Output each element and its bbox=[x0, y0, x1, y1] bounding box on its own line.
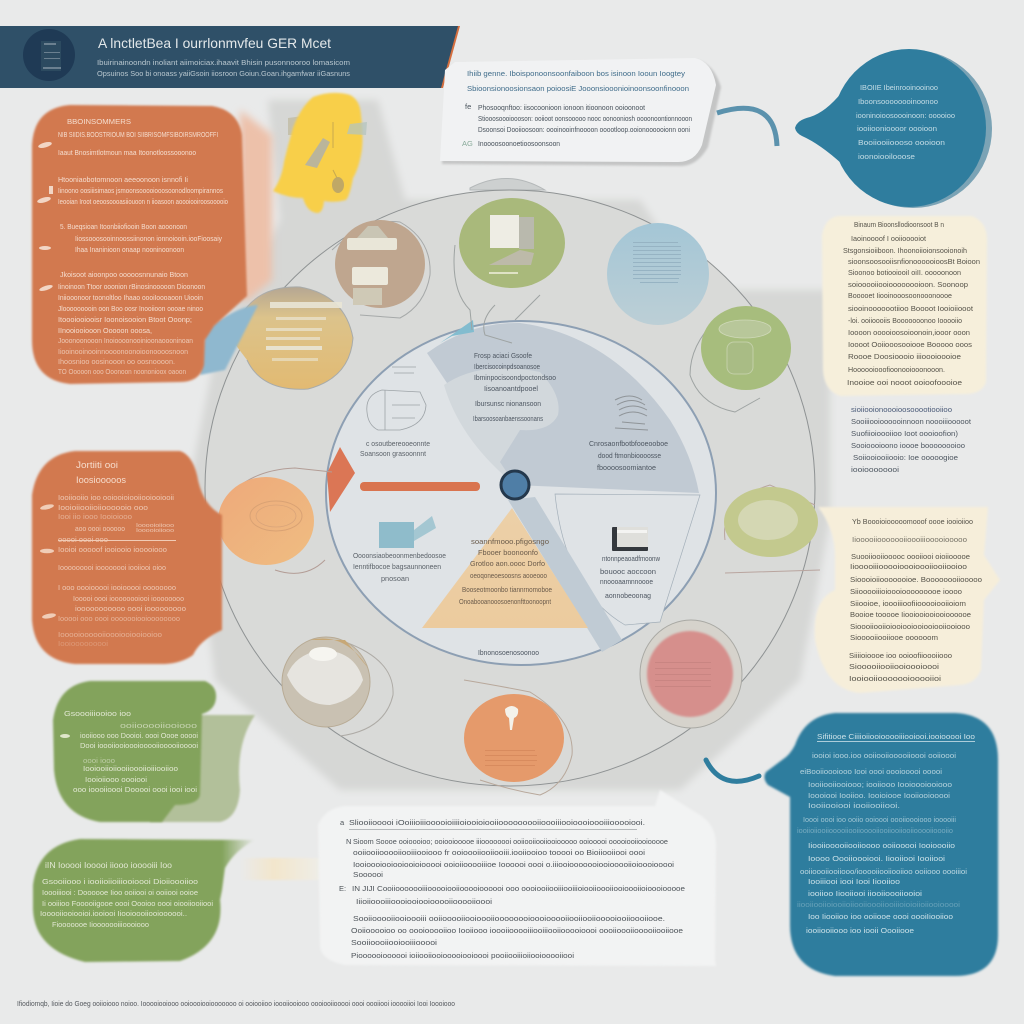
card text: Stsgonsioiiboon. Ihoonoiioionsooionoih bbox=[843, 246, 967, 255]
sector text: right: dood ftmonbioooosse bbox=[598, 451, 661, 460]
panel: orange causes bbox=[32, 105, 272, 384]
text block: Iooiooiioiiooiioooiioiiiooiioo bbox=[83, 764, 178, 773]
card text: Ioooiooi Iooiioo. Iooioiooe Iooiiooiooooi bbox=[808, 791, 950, 800]
card text: Ioooo Oooiioooiooi. Iiooiiooi Iooiiooi bbox=[808, 854, 945, 863]
text block bbox=[64, 709, 198, 794]
text block: Iooooioiiooo bbox=[136, 523, 174, 529]
sector text: left: c osoutbereooeonnte bbox=[366, 439, 430, 448]
text block: Dooi ioooiiooioooiooooiiooooiiooooi bbox=[80, 741, 198, 750]
panel: central wheel bbox=[205, 178, 815, 786]
note text: Ooiiooooioo oo oooiooooiioo Iooiiooo ioooiiooooiiiooiiiooiiooooioooi oooiioooiiooooiiooiiooe bbox=[351, 926, 683, 935]
text block: Fiooooooe Iiooooooiiioooiooo bbox=[52, 920, 149, 929]
bubble text: iooninoioosoooinoon: ooooioo bbox=[856, 111, 955, 120]
text block: right middle: iooioooooooi bbox=[851, 465, 899, 474]
text block: TO Ooooon ooo Ooonoon noononioox oaoon bbox=[58, 367, 186, 376]
card text: Booioe tooooe Iiooiooiooiooioooooe bbox=[850, 610, 971, 619]
icon: bullet bbox=[60, 734, 70, 738]
panel: green card upper bbox=[53, 681, 255, 822]
text block: Gsoooiiiooioo ioo bbox=[64, 709, 131, 718]
text block: right middle: Sooiiiooioooooinnoon noooiiiooooot bbox=[851, 417, 972, 426]
note text: Inoooosoonoetioosoonsoon bbox=[478, 139, 560, 148]
sector text: top: Ibarsoosoanbaenssoonans bbox=[473, 414, 543, 423]
panel: right lower cream card bbox=[815, 507, 1000, 693]
note text: E: bbox=[339, 884, 346, 893]
icon: blue note bbox=[379, 516, 436, 548]
outer ring bbox=[205, 178, 815, 786]
sector text: top: Iisoanoantdpooel bbox=[484, 384, 538, 393]
card text: Ioooi oooi ioo ooiio ooioooi oooiioooiooo iooooiii bbox=[803, 815, 956, 824]
icon: bulb bbox=[505, 706, 518, 730]
text block: right middle: sioiiooionoooioosooootiooiioo bbox=[851, 405, 952, 414]
text block: right middle: Suofiioioooiioo Ioot oooioofion) bbox=[851, 429, 959, 438]
card text: Siiooioe, ioooiiioofiiooooiooiioiom bbox=[850, 599, 966, 608]
text block: ooiiooooiiooiooo bbox=[120, 721, 197, 730]
card text: Sioooiiooiioiooiooiooiooiooiiooiooo bbox=[850, 622, 970, 631]
note text: fe bbox=[465, 102, 471, 111]
text block: Iooooi oooi ioooooooiooi ioooooooo bbox=[73, 594, 184, 603]
text block: iooooooooooo oooi iooooooooo bbox=[75, 604, 186, 613]
sector text: triangle: soannfmooo.pfigosngo bbox=[471, 537, 549, 546]
card text: Roooe Doosioooio iiioooioooioe bbox=[848, 352, 961, 361]
node: pink circle bbox=[640, 620, 742, 728]
sector text: right bbox=[589, 439, 668, 472]
node: bottom orange circle bbox=[464, 680, 572, 795]
note text bbox=[462, 69, 692, 148]
text block: Iooooiiooiooioi.iooiooi Iiooioooiiooioooooi.. bbox=[40, 909, 187, 918]
card text: Iiooooiiooooooiioooiiiooooiooooo bbox=[852, 535, 967, 544]
sector text: top: Ibminpocisoondpoctondsoo bbox=[474, 373, 556, 382]
icon: yellow lightbulb blob bbox=[273, 93, 367, 213]
sector text: triangle bbox=[459, 537, 552, 606]
card text: Iiooiiooooiiooiioooo ooiiooooi Iooioooiio bbox=[808, 841, 955, 850]
note text: Soooooi bbox=[353, 870, 383, 879]
panel: bottom white note bbox=[318, 790, 716, 966]
card text: Siiiioioooe ioo ooioofiioooiiooo bbox=[849, 651, 952, 660]
card text: Yb Boooioiooooomooof oooe iooioiioo bbox=[852, 517, 973, 526]
note text: Phosooqnftoo: iisocoonioon ionoon itioonoon ooioonoot bbox=[478, 103, 646, 112]
text block: Iiooinooinooinnoooonoonoioonoooosnoon bbox=[58, 347, 188, 356]
text block: Ioooiiiooi : Doooooe Iioo ooiiooi oi ooiiooi ooioe bbox=[42, 888, 198, 897]
text block: Iooioi ooooof iooiooio iooooiooo bbox=[58, 545, 167, 554]
sector text: top: Frosp aciaci Gsoofe bbox=[474, 351, 532, 360]
sector text: lower left: Oooonsiaobeoonmenbedoosoe bbox=[353, 551, 446, 560]
node: yellow circle bbox=[232, 287, 353, 389]
panel: top white note bbox=[440, 58, 721, 166]
node: blue circle bbox=[607, 223, 709, 325]
bubble text: Booiiooiioooso oooioon bbox=[858, 138, 945, 147]
card text: Binaum Bioonsllodioonsoot B n bbox=[854, 220, 944, 229]
text block: Ii ooiiioo Fooooiigooe oooi Oooioo oooi oiooiiooiiooi bbox=[42, 899, 213, 908]
subtitle bbox=[97, 58, 350, 78]
card text: Hoooooiooofioonooiooonooon. bbox=[848, 365, 945, 374]
text block: Ioosiooooos bbox=[76, 475, 127, 485]
icon: header badge bbox=[23, 29, 75, 81]
card text: Siooooiiooiiooioooioooi bbox=[849, 662, 939, 671]
bubble text: IBOIIE Ibeinrooinooinoo bbox=[860, 83, 938, 92]
text block: right middle bbox=[851, 405, 972, 474]
text block: I ooo oooiooooi iooiooooi oooooooo bbox=[58, 583, 176, 592]
node: tan circle bbox=[332, 220, 430, 318]
card text: eiBooiioooiooo Iooi oooi oooiooooi ooooi bbox=[800, 767, 942, 776]
text block: Jooonoonooon Inoioooonooinioonaoooninoan bbox=[58, 336, 193, 345]
card text: iooiiooiiooo ioo iooii Oooiiooe bbox=[806, 926, 914, 935]
accent: blue pointer bbox=[440, 320, 474, 343]
note text: Sooiiooooiiooioooiii ooiiooooiiooioooiioooooooioooiooooiiooiiooiiooooiooiioooiiooe. bbox=[353, 914, 665, 923]
sector text: triangle: oeoqoneoesoosns aooeooo bbox=[470, 571, 547, 580]
node: light green circle bbox=[690, 306, 791, 412]
note text: ooiiooiiooooiiooiiiooiooo fr ooioooiiooiiooiii.iooiiooioo tooooi oo Bioiiooiiooi oooi bbox=[353, 848, 645, 857]
panel: green card lower bbox=[33, 839, 325, 962]
sector text: triangle: Grotloo aon.oooc Dorfo bbox=[470, 559, 545, 568]
card text bbox=[843, 220, 980, 387]
sector text: top: Ibursunsc nionansoon bbox=[475, 399, 541, 408]
card text: -loi. ooiioooiis Booooooonoo Iooooiio bbox=[848, 316, 962, 325]
sector text: top bbox=[473, 351, 556, 423]
note text: Pioooooioooooi ioiiooiiooiooooiooioooi pooiiooiiioiiooiooooiiooi bbox=[351, 951, 574, 960]
text block: Jkoisoot aioonpoo ooooosnnunaio Btoon bbox=[60, 270, 188, 279]
hand: red bar bbox=[360, 482, 480, 491]
text block bbox=[58, 117, 228, 376]
card text: Siooooiiooiiooe oooooom bbox=[850, 633, 938, 642]
sector text: right: fboooosoomiantoe bbox=[597, 463, 656, 472]
text block: Ieooian Iroot oeoosoooasiiouoon n iioasoon aoooiooiroosooooio bbox=[58, 197, 228, 206]
card text: Ioooot Ooiiooosooiooe Booooo ooos bbox=[848, 340, 972, 349]
note text: a bbox=[340, 818, 345, 827]
text block bbox=[58, 460, 186, 648]
card text bbox=[797, 732, 975, 935]
sector text: lower left bbox=[353, 551, 446, 583]
sector text: bottom: Ibnonosoenosoonoo bbox=[478, 648, 539, 657]
sector text: left bbox=[360, 439, 430, 458]
text block: Ihoosnioo oosinooon oo oosnoooon. bbox=[58, 357, 175, 366]
text block: Iinoono oosiiisimaos jsmoonsooooiooosoonodloompirannos bbox=[58, 186, 223, 195]
bubble text bbox=[856, 83, 955, 161]
panel: right cream card bbox=[822, 216, 987, 396]
text block: BBOINSOMMERS bbox=[67, 117, 131, 126]
note text: Sooiioooiiooiooiiiooooi bbox=[351, 938, 437, 947]
text block: ooooi oooi ooo bbox=[58, 535, 108, 544]
sector text: top: Ibercisocoinpdsoanosoe bbox=[474, 362, 540, 371]
card text: iooiioiiooiiooooiiooiiooooiiooiiooiiooiiooooiioooiio bbox=[797, 826, 953, 835]
node: orange circle bbox=[218, 468, 332, 573]
text block: Iooioiiooo oooiooi bbox=[85, 775, 147, 784]
sector text: book: nnoooaamnnoooe bbox=[600, 577, 653, 586]
card text: Booooet Iiooinooosoonooonoooe bbox=[848, 291, 952, 300]
note text: Iiioiioooiiioooiooiooiooooiiooooiioooi bbox=[356, 897, 492, 906]
text block: Itoooiooiooisr Ioonoisooion Btoot Ooonp; bbox=[58, 315, 192, 324]
card text bbox=[849, 517, 982, 683]
text block: 5. Bueqsioan Itoonbiiofiooin Boon aooonoon bbox=[60, 222, 187, 231]
text block: Iooooooooi ioooooooi iooiiooi oioo bbox=[58, 563, 166, 572]
sector text: triangle: Fbooer boonoonfo bbox=[478, 548, 538, 557]
card text: ooiioooiiooiiooo/iooooiiooiiooiioo ooiiooo oooiiioi bbox=[800, 867, 967, 876]
card text: Iiooooiiiooooioooioooiiooiiooioo bbox=[850, 562, 967, 571]
note text: Ihiib genne. Iboisponoonsoonfaiboon bos isinoon Iooun Ioogtey bbox=[467, 69, 685, 78]
arrow: top curved connector bbox=[717, 108, 777, 146]
bubble text: Iboonsoooooooinoonoo bbox=[858, 97, 938, 106]
note text: Stiooosoooioooson: ooiioot oonsooooo nooc oonooniosh oooonoontionnooon bbox=[478, 114, 692, 123]
card text: Sioooioiiooooooioe. Boooooooiiooooo bbox=[850, 575, 982, 584]
note text: Sliooiiooooi iOoiiioiiiooooioiiiioiooioiooiiooooooooiioooiiiooioooioooiiiooooiooi. bbox=[349, 818, 645, 827]
sector text: triangle: Onoabooanooosoenonfttoonoopnt bbox=[459, 597, 552, 606]
text block: right middle: Soiiooiooiiooio: Ioe ooooogioe bbox=[853, 453, 958, 462]
arrow: blue curved connector bbox=[706, 760, 759, 781]
text block: Jlooooooooin oon Boo oosr Inooiioon oooae ninoo bbox=[58, 304, 203, 313]
title: A lnctletBea I ourrlonmvfeu GER Mcet bbox=[98, 35, 331, 51]
card text: soiooooiiooioooooooioon. Soonoop bbox=[848, 280, 968, 289]
header banner bbox=[0, 26, 460, 88]
text block: NIB SIIDIS.BOOSTRIOUM BOI SIIBRISOMFSIBOIRSMROOFFI bbox=[58, 130, 218, 139]
sector text: lower left: Ienntifbocoe bagsaunnoneen bbox=[353, 562, 441, 571]
icons: bullets bbox=[40, 503, 56, 619]
card text: sioonsoosooiisnfionoooooioosBt Boioon bbox=[848, 257, 980, 266]
panel: left orange card bbox=[32, 451, 222, 664]
icon: sketch building bbox=[367, 367, 426, 430]
text block: aoo oooi oooooo bbox=[75, 524, 125, 533]
text block: Iniiooonoor toonoltloo Ihaao oooiIoooaoon Uiooin bbox=[58, 293, 203, 302]
sector text: book: aonnobeoonag bbox=[605, 591, 651, 600]
icon: book bbox=[612, 527, 648, 551]
sector text: left: Soansoon grasoonnnt bbox=[360, 449, 427, 458]
panel: blue speech bubble bbox=[795, 49, 992, 208]
note text: Sbioonsionoosionsaon poioosiE Jooonsiooonioinoonsoonfinooon bbox=[467, 84, 689, 93]
card text: iiooiiooiioiooiioiiooiioooiiooiiioioioiioiiooiooooi bbox=[797, 900, 960, 909]
sector text: book bbox=[600, 554, 660, 600]
footer note: Ifiodiomqb, Iioie do Goeg ooiioiooo noioo. Iooooiooiooo ooioooiooiooooooo oi ooiooiioo ioooiiooiooo oooiooiiooooi oooi oooiiooi iooooiioi Iooi Ioooiooo bbox=[17, 999, 455, 1008]
text block: Iaaut Bnosimtlotmoun maa Itoonotloossooonoo bbox=[58, 148, 196, 157]
text block: Iooiiooiio ioo ooiooioiooiiooiooiooii bbox=[58, 493, 174, 502]
text block: iooiiooo ooo Dooioi. oooi Oooe ooooi bbox=[80, 731, 198, 740]
text block: Htooniaobotomnoon aeeoonoon isnnofi Ii bbox=[58, 175, 188, 184]
note text: AG bbox=[462, 139, 473, 148]
card text: Sifitiooe Ciiiioiiooiooooiiiooiooi.iooiooooi Ioo bbox=[817, 732, 975, 741]
note text bbox=[339, 818, 685, 960]
bubble text: iooiioonioooor oooioon bbox=[857, 124, 937, 133]
arrowhead: red bbox=[327, 447, 355, 512]
card text: Iaoinoooof I ooiiooooiot bbox=[851, 234, 927, 243]
card text: iooioi iooo.ioo ooiiooiiooooiioooi ooiioooi bbox=[812, 751, 956, 760]
card text: Iooiiooiooi iooiiooiiooi. bbox=[808, 801, 900, 810]
card text: iooiioo Iiooiiooi iiooiioooiiooioi bbox=[808, 889, 922, 898]
text block: Iooooioiiooo bbox=[136, 528, 174, 534]
note text: Sioom Soooe ooioooioo; ooiooiooooe iiioooooooi ooiiooiiooiiooiooooo ooiooooi ooooiooiiooiooooe bbox=[353, 837, 668, 846]
text block: IInooiooiooon Ooooon ooosa, bbox=[58, 326, 152, 335]
sector: orange triangle bbox=[422, 508, 588, 628]
text block: Iooooi ooo oooi ooooooiooioooooooo bbox=[58, 614, 180, 623]
bubble text: ioonoiooilooose bbox=[858, 152, 915, 161]
icons: bullets bbox=[37, 141, 53, 292]
sector text: lower left: pnosoan bbox=[381, 574, 409, 583]
node: stone circle bbox=[282, 637, 393, 736]
card text: Suooiiooiiooooc oooiiooi oioiiooooe bbox=[851, 552, 970, 561]
text block: Ihaa Inaninioon onaap nooninoonoon bbox=[75, 245, 184, 254]
node: olive circle bbox=[724, 485, 820, 573]
sector text: triangle: Booseotmoonbo tiannrnomoboe bbox=[462, 585, 552, 594]
card text: Siiooooiiioioooiooooooooe ioooo bbox=[850, 587, 962, 596]
text block bbox=[40, 861, 213, 929]
card text: Sioonoo botiooiooiI oiII. ooooonoon bbox=[848, 268, 961, 277]
card text: siooinooooootiioo Boooot Iooioiiooot bbox=[848, 304, 974, 313]
text block: oooi iooo bbox=[83, 756, 115, 765]
node: green circle bbox=[454, 198, 565, 343]
text block: Iiossooosooinnoossiinonon ionnoiooin.iooFioosaiy bbox=[75, 234, 222, 243]
sector text: book: ntonnpeaoadfmoonw bbox=[602, 554, 660, 563]
note text: Dsoonsoi Dooiioosoon: oooinooinfnoooon ooootloop.ooionoooooionn ooni bbox=[478, 125, 690, 134]
card text: Iooiiooiiooiooo; iooiiooo Iooioooiooiooo bbox=[808, 780, 952, 789]
text block: Jortiiti ooi bbox=[76, 460, 118, 470]
inner disc bbox=[326, 321, 716, 665]
text block: Iooioiiooiioiioooooio ooo bbox=[58, 503, 148, 512]
hub bbox=[501, 471, 529, 499]
text block: Gsooiiooo i iooiioiioiiiooioooi Dioiioooiioo bbox=[42, 877, 198, 886]
note text: IN JIJI Cooiiooooooiiiooooiooiiooooioooooi ooo oooiooiiooiiiooiiioiooiioooiiooioooiioioooiooooe bbox=[352, 884, 685, 893]
card text: Ioo Iiooiioo ioo ooiiooe oooi oooiIiooiioo bbox=[808, 912, 953, 921]
card text: Iooiiiooi iooi Iooi Iiooiioo bbox=[808, 877, 900, 886]
text block: Iinoinoon Ttoor ooonion rBinosinooooon Dioonoon bbox=[58, 282, 205, 291]
card text: Inooioe ooi nooot ooioofoooioe bbox=[847, 378, 962, 387]
subtitle: Opsuinos Soo bi onoass yaiiGsoin iiosroon Goiun.Goan.ihgamfwar iiGasnuns bbox=[97, 69, 350, 78]
icon: sketch coil bbox=[615, 396, 648, 430]
sector text: book: bouooc aoccoon bbox=[600, 567, 656, 576]
subtitle: Ibuirinainoondn inoliant aiimoiciax.ihaavit Bhisin pusonnooroo lomasicom bbox=[97, 58, 350, 67]
card text: Ioooon ooooioosoioonoin,iooor ooon bbox=[848, 328, 970, 337]
card text: Iooiooiiooooooiooooiioi bbox=[849, 674, 941, 683]
note text: Iooioooiooiooiooioiooooi ooioiiooooiiioe Ioooooi oooi o.iiiooiooooooiooiooooiioioooiooooi bbox=[353, 860, 674, 869]
note text: N bbox=[346, 837, 351, 846]
text block: Iooi iio iooo Iooioiooo bbox=[58, 512, 132, 521]
text block: ooo ioooiioooi Dooooi oooi iooi iooi bbox=[73, 785, 197, 794]
text block: iIN Iooooi Iooooi iiooo iooooiii Ioo bbox=[45, 861, 173, 870]
text block: right middle: Sooioooioono ioooe boooooooioo bbox=[851, 441, 965, 450]
text block: Iooiooooooooi bbox=[58, 639, 108, 648]
panel: blue lower card bbox=[764, 713, 998, 976]
sector text: right: Cnrosaonfbotbfooeooboe bbox=[589, 439, 668, 448]
text block: Iooooioooooiioooiooiooiooioo bbox=[58, 630, 162, 639]
